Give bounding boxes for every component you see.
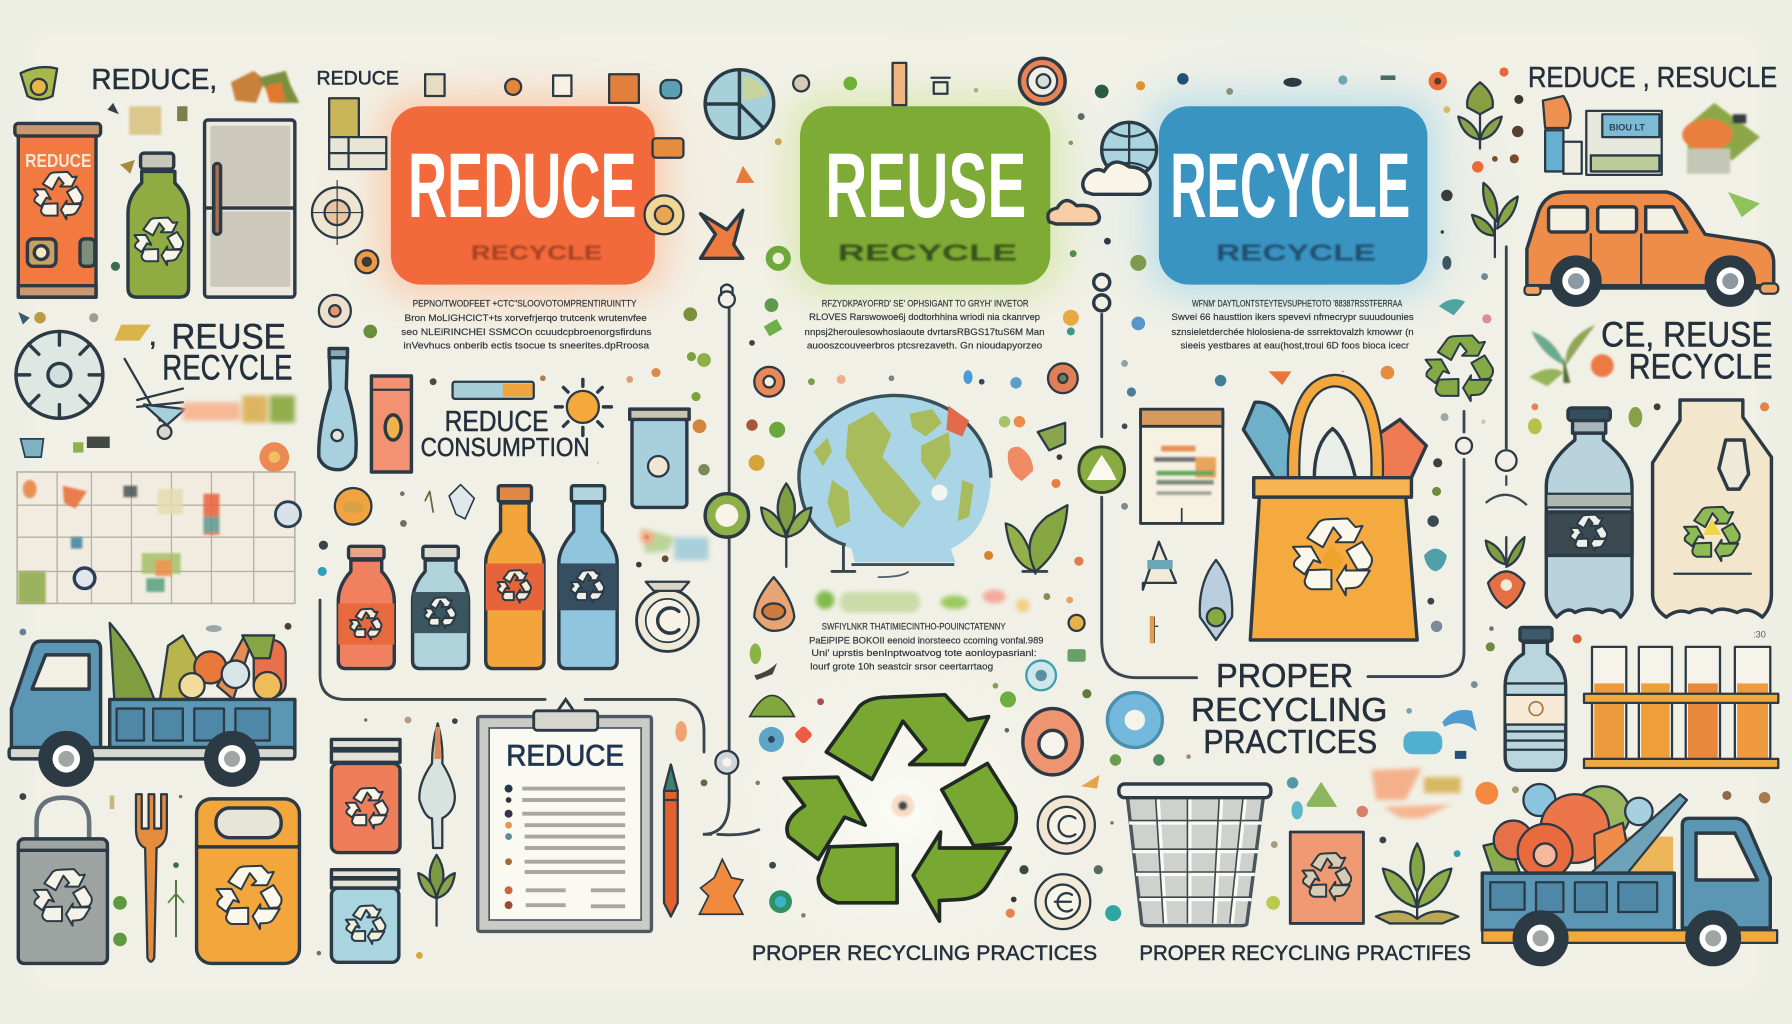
icon: orange box bbox=[371, 376, 411, 472]
paragraph: Recycle text: sieeis yestbares at eau(host,troui 6D foos bioca icecr bbox=[1181, 341, 1409, 351]
icon: labelled small bottle bbox=[1505, 627, 1566, 770]
calendar margins bbox=[259, 442, 289, 472]
badge: Reuse bbox=[800, 106, 1050, 285]
icon: spiral circle bbox=[1019, 58, 1065, 104]
icon: small tower and rocket bbox=[1143, 542, 1232, 643]
heading: Reduce top left: REDUCE, bbox=[91, 64, 217, 96]
paragraph: Recycle text bbox=[1171, 298, 1414, 351]
icon: colourful blob top left bbox=[231, 71, 299, 103]
paragraph: Reduce text: PEPNO/TWODFEET +CTC"SLOOVOTOMPRENTIRUINTTY bbox=[413, 298, 637, 308]
heading: Proper recycling practices stacked: PRACTICES bbox=[1203, 724, 1377, 761]
truck load bbox=[110, 623, 286, 699]
icon: orange jug bbox=[197, 799, 299, 963]
paragraph: Recycle text: WFNM' DAYTLONTSTEYTEVSUPHETOTO '88387RSSTFERRAA bbox=[1192, 298, 1403, 308]
icon: fork bbox=[136, 794, 167, 962]
icon: plant in soil bbox=[1376, 843, 1458, 923]
paragraph: lower text: PaEiPIPE BOKOII eenoid inorsteeco ccoming vonfal.989 bbox=[809, 635, 1043, 645]
heading: Reuse Recycle left: REUSE bbox=[171, 317, 286, 357]
icon: tall blue bottle bbox=[319, 349, 356, 470]
icon: globe with clouds bbox=[1048, 122, 1157, 224]
blurred shapes right of bottles bbox=[640, 528, 709, 560]
icon: grey-blue bottle bbox=[413, 546, 469, 669]
icon: green ring bbox=[769, 249, 787, 267]
clipboard heading: REDUCE bbox=[506, 740, 624, 773]
paragraph: Reduce text: seo NLEiRINCHEI SSMCOn ccuudcpbroenorgsfirduns bbox=[401, 327, 652, 337]
icon: plant with carrot bbox=[1486, 537, 1525, 608]
blurred strip bbox=[183, 395, 295, 423]
heading: Ce Reuse Recycle right: RECYCLE bbox=[1629, 346, 1773, 386]
heading: small Reduce: REDUCE bbox=[317, 68, 399, 90]
icons row above bottles bbox=[335, 485, 474, 525]
around badges bbox=[1130, 255, 1146, 271]
around basket and bag bottom bbox=[1287, 777, 1298, 789]
continents bbox=[814, 406, 974, 528]
bottles margins bbox=[319, 541, 328, 550]
icon: seed pod bbox=[754, 577, 794, 631]
icon: blue ring bbox=[1107, 693, 1162, 747]
icon: recycling node bbox=[1079, 447, 1125, 493]
heading: Proper recycling practices stacked bbox=[1191, 658, 1387, 761]
icon: large recycling symbol bbox=[784, 695, 1016, 921]
icon: ring node lower bbox=[715, 751, 738, 774]
badge: Recycle bbox=[1159, 106, 1427, 285]
heading: Reduce consumption bbox=[421, 406, 590, 462]
paragraph: lower text: SWFIYLNKR THATIMIECINTHO-POUINCTATENNY bbox=[822, 622, 1006, 632]
icon: plant on stem bbox=[1472, 183, 1518, 257]
column between left and globe bbox=[746, 419, 758, 431]
icon: right water bottle bbox=[1546, 408, 1632, 617]
badge: Reuse: REUSE bbox=[825, 135, 1026, 237]
icon: orange car bbox=[1525, 192, 1778, 305]
calendar grid bbox=[17, 472, 295, 603]
icon: document card bbox=[1141, 409, 1223, 523]
icon: pot top left bbox=[21, 67, 57, 99]
icon: orange recycling bin: REDUCE bbox=[25, 150, 91, 171]
icon: mesh basket bbox=[1119, 784, 1271, 926]
icon: concentric circles lower bbox=[1035, 874, 1090, 929]
badge subtitle: RECYCLE bbox=[471, 241, 602, 264]
icon: orange recycling card bbox=[1290, 832, 1363, 923]
icon: orange recycling bin bbox=[15, 123, 101, 297]
icon: dotted medallion bbox=[891, 794, 914, 817]
paragraph: Reduce text: Bron MoLIGHCICT+ts xorvefrjerqo trutcenk wrutenvfee bbox=[405, 313, 647, 323]
paragraph: lower text: lourf grote 10h seastcir srsor ceertarrtaog bbox=[810, 662, 993, 672]
text: small number: :30 bbox=[1753, 630, 1766, 640]
icon: tote bag with items bbox=[1243, 381, 1426, 640]
paragraph: Reuse text: RFZYDKPAYOFRD' SE' OPHSIGANT TO GRYH' INVETOR bbox=[822, 298, 1029, 308]
badge: Reduce: REDUCE bbox=[408, 135, 637, 237]
icon: store scene bbox=[1543, 96, 1662, 175]
icon: double ring node bbox=[1094, 274, 1110, 311]
icon: leaf sprig bbox=[418, 855, 455, 926]
icon: spiky plant bbox=[1529, 325, 1614, 386]
paragraph: Reuse text bbox=[805, 298, 1045, 351]
badge subtitle: RECYCLE bbox=[1216, 240, 1376, 266]
icon: red jar bbox=[331, 739, 400, 853]
icon: fridge bbox=[205, 120, 295, 297]
icons around Reduce badge bbox=[312, 74, 683, 327]
icon: blue bottle bbox=[559, 486, 617, 669]
heading: Reuse Recycle left bbox=[149, 317, 293, 387]
small icons above fridge bbox=[107, 103, 187, 135]
icon: small blue ring bbox=[1026, 661, 1056, 690]
right of bag bbox=[1441, 413, 1449, 421]
paragraph: lower text: Uni' uprstis benInptwoatvog tote aonloypasrianl: bbox=[811, 648, 1037, 658]
icon: right plant bbox=[1006, 505, 1067, 574]
icons around globe bbox=[754, 363, 1078, 481]
icon: left garbage truck bbox=[9, 623, 295, 785]
icon: sun bbox=[555, 379, 611, 435]
icon: orange bottle bbox=[486, 486, 544, 669]
caption: proper recycling practices right: PROPER RECYCLING PRACTIFES bbox=[1139, 940, 1471, 965]
icon: ring nodes bbox=[1456, 438, 1517, 471]
badge subtitle: RECYCLE bbox=[838, 240, 1017, 266]
right of big recycle bbox=[1000, 691, 1016, 707]
icon: top right plant bbox=[1458, 82, 1502, 149]
icon: left plant bbox=[761, 483, 811, 567]
icon: spoon bbox=[419, 723, 455, 848]
connector lines bbox=[320, 247, 1506, 835]
icon: orange star shape bbox=[701, 210, 743, 258]
small icons above Reuse badge bbox=[793, 63, 978, 105]
paragraph margins bbox=[765, 298, 778, 312]
icon: grey bag bbox=[18, 798, 107, 963]
badge: Reduce bbox=[391, 106, 655, 285]
icon: pencil bbox=[664, 765, 678, 917]
paragraph: Recycle text: Swvei 66 hausttion ikers spevevi nfmecrypr suuudounies bbox=[1171, 312, 1414, 322]
heading: Reuse Recycle left: RECYCLE bbox=[162, 347, 293, 387]
right margin blue blobs bbox=[1442, 710, 1477, 731]
left of big recycle bbox=[750, 643, 761, 664]
heading: Ce Reuse Recycle right: CE, REUSE bbox=[1601, 314, 1773, 354]
icon: ring node with figure bbox=[705, 494, 749, 537]
heading: Proper recycling practices stacked: PROPER bbox=[1216, 658, 1353, 695]
icon: small recycling arrows bbox=[1426, 336, 1493, 401]
icon: pill bar bbox=[453, 382, 534, 399]
icon: green bottle bbox=[128, 153, 189, 297]
heading: Ce Reuse Recycle right bbox=[1601, 314, 1773, 386]
icon: globe lightbulb bbox=[799, 395, 991, 577]
icon: gear wheel bbox=[16, 331, 103, 418]
icon: top right colourful scene bbox=[1682, 103, 1760, 174]
icon: lock node bbox=[719, 285, 735, 307]
icon: orange dot bbox=[1475, 782, 1498, 805]
blurred orange patch bbox=[1371, 768, 1461, 818]
heading: Reduce consumption: CONSUMPTION bbox=[421, 432, 590, 462]
paragraph: Reduce text bbox=[401, 298, 652, 351]
truck margins bbox=[19, 629, 26, 635]
icon: concentric circles upper bbox=[1038, 797, 1095, 854]
icon: scale bbox=[637, 582, 698, 651]
icon: broom tool bbox=[125, 359, 185, 439]
top row bbox=[1429, 72, 1447, 90]
icon: right jug bbox=[1653, 400, 1771, 617]
truck load bbox=[1483, 784, 1687, 879]
paragraph: Reuse text: auooszcouveerbros ptcsrezaveth. Gn nioudapyorzeo bbox=[807, 341, 1042, 351]
icon: right garbage truck bbox=[1482, 784, 1777, 965]
icon: test tube rack bbox=[1584, 647, 1778, 768]
paragraph: Reuse text: RLOVES Rarswowoe6j dodtorhhina wriodi nia ckanrvep bbox=[809, 312, 1040, 322]
paragraph: Reduce text: inVevhucs onberib ectis tsocue ts sneerites.dpRroosa bbox=[403, 341, 650, 351]
paragraph: Recycle text: sznsieletderchée hlolosiena-de ssrrektovalzh kmowwr (n bbox=[1171, 327, 1414, 337]
clipboard list bbox=[522, 789, 625, 906]
heading: Reduce consumption: REDUCE bbox=[445, 406, 549, 438]
icon: orange ring bbox=[1023, 709, 1082, 775]
badge: Recycle: RECYCLE bbox=[1170, 135, 1410, 237]
icon: cylinder jar bbox=[630, 409, 689, 507]
row above lightbulb bbox=[808, 378, 815, 385]
paragraph: Reuse text: nnpsj2heroulesowhosiaoute dvrtarsRBGS17tuS6M Man bbox=[805, 327, 1045, 337]
blurred icons above paragraph bbox=[816, 590, 1030, 613]
heading: Proper recycling practices stacked: RECYCLING bbox=[1191, 692, 1387, 729]
icon: clipboard with Reduce list bbox=[478, 699, 651, 931]
heading: Reuse Recycle left: , bbox=[149, 319, 157, 352]
icon: store scene: BIOU LT bbox=[1609, 122, 1645, 132]
icon: top globe bbox=[705, 70, 774, 138]
paragraph: lower text bbox=[809, 622, 1043, 672]
icon: blue jar bbox=[331, 870, 399, 962]
icon: red bottle bbox=[338, 546, 394, 669]
caption: proper recycling practices centre: PROPER RECYCLING PRACTICES bbox=[752, 940, 1097, 965]
